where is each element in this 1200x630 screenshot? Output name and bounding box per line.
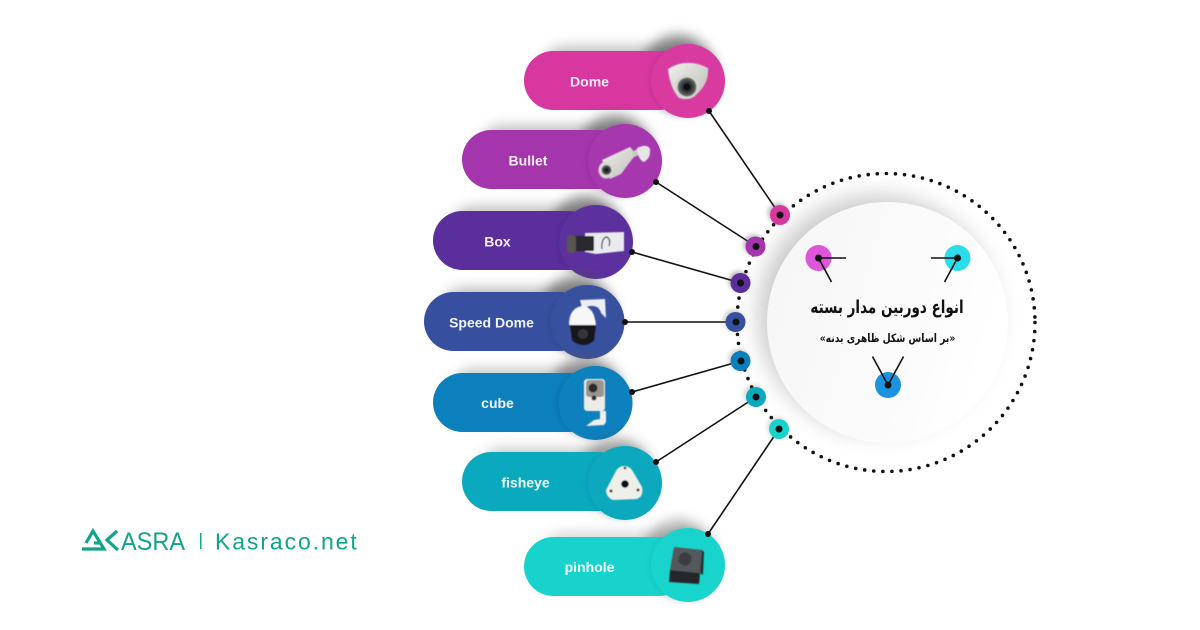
panel: central disc [758, 195, 1008, 443]
label: fisheye: fisheye [501, 474, 550, 490]
label: Dome: Dome [570, 74, 609, 90]
title: انواع دوربین مدار بسته [810, 296, 964, 318]
logo separator [200, 533, 202, 549]
inner marker: pink [806, 245, 846, 282]
icon: logo mark [82, 531, 118, 550]
panel: Dome [524, 35, 725, 118]
connector: Dome [709, 111, 780, 215]
ring node: fisheye [744, 385, 766, 407]
logo [82, 528, 359, 556]
panel: central dotted ring [737, 174, 1035, 472]
label: Bullet: Bullet [509, 152, 548, 168]
panel: Bullet [462, 115, 662, 198]
ring node: Box [728, 271, 750, 293]
panel: Box [433, 196, 633, 279]
label: pinhole: pinhole [565, 559, 615, 575]
logo website: Kasraco.net [215, 528, 359, 554]
icon: fisheye camera [606, 466, 642, 500]
icon: pinhole camera [669, 547, 704, 584]
icon: box camera [567, 232, 624, 254]
ring node: cube [728, 349, 750, 371]
icon: dome camera [668, 63, 708, 99]
ring node: pinhole [767, 417, 789, 439]
ring node: Bullet [744, 234, 766, 256]
connector: Bullet [656, 182, 756, 246]
panel: fisheye [462, 438, 662, 520]
panel: Speed Dome [424, 276, 624, 359]
label: Speed Dome: Speed Dome [449, 314, 534, 330]
connector: pinhole [708, 429, 779, 534]
inner marker: blue [872, 356, 904, 398]
label: cube: cube [481, 395, 514, 411]
connector: Box [632, 252, 741, 283]
connector: fisheye [656, 397, 756, 462]
panel: cube [433, 357, 632, 440]
icon: bullet camera [598, 146, 650, 179]
connector: Speed Dome [625, 321, 736, 323]
connector: cube [632, 361, 741, 392]
ring node: Speed Dome [724, 310, 746, 332]
inner marker: cyan [931, 245, 970, 282]
node connector dots [622, 108, 712, 537]
ring node: Dome [768, 203, 790, 225]
logo wordmark: ASRA [121, 528, 185, 556]
icon: cube camera [584, 379, 606, 426]
icon: speed dome camera [569, 299, 606, 345]
label: Box: Box [484, 234, 511, 250]
subtitle: «بر اساس شکل ظاهری بدنه» [820, 332, 955, 345]
panel: pinhole [524, 520, 725, 602]
